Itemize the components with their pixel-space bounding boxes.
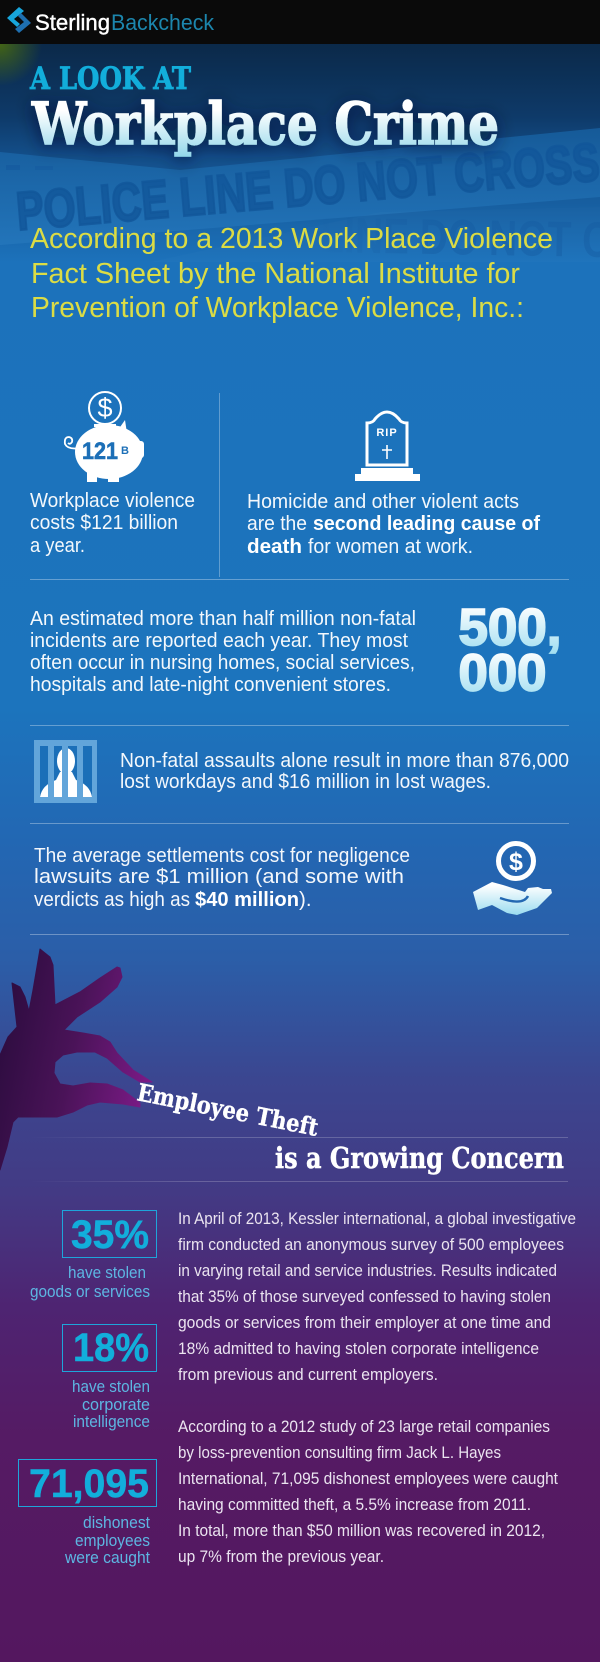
stat: homicide: for women at work.	[308, 535, 473, 558]
stat: 71,095: employees	[75, 1532, 150, 1550]
stat: lost workdays: Non-fatal assaults alone result in more than 876,000	[120, 749, 569, 772]
intro text	[30, 223, 553, 324]
big number 500,000	[458, 599, 562, 702]
stat: homicide: Homicide and other violent acts	[247, 490, 519, 513]
stat: settlements: verdicts as high as	[34, 888, 190, 911]
heading: employee theft	[30, 1077, 568, 1182]
stat: homicide: death	[247, 535, 302, 558]
big number 500,000: 000	[458, 644, 546, 702]
header bar	[0, 0, 600, 44]
stat: 71,095: were caught	[64, 1549, 150, 1567]
body text: Kessler survey: from previous and current employers.	[178, 1365, 438, 1384]
divider	[219, 393, 220, 577]
stat: violence cost: Workplace violence	[30, 489, 195, 512]
title: Workplace Crime	[31, 90, 499, 158]
stat: non-fatal incidents: An estimated more than half million non-fatal	[30, 607, 416, 630]
stat: 18%: 18%	[73, 1326, 149, 1370]
body text: Kessler survey: 18% admitted to having stolen corporate intelligence	[178, 1339, 539, 1358]
body text: Kessler survey: that 35% of those surveyed confessed to having stolen	[178, 1287, 551, 1306]
stat: lost workdays: lost workdays and $16 million in lost wages.	[120, 770, 491, 793]
stat: settlements: lawsuits are $1 million (and some with	[34, 865, 404, 888]
icon: RIP tombstone: RIP	[376, 427, 398, 439]
stat: 35%: have stolen	[68, 1264, 146, 1282]
logo: Sterling Backcheck: Backcheck	[111, 10, 215, 35]
stat: 71,095: 71,095	[29, 1462, 149, 1506]
logo: Sterling Backcheck: Sterling	[35, 10, 110, 35]
stat: 35%	[30, 1210, 156, 1301]
stat: homicide: second leading cause of	[313, 512, 540, 535]
stat: homicide	[247, 490, 540, 558]
title	[29, 61, 499, 158]
stat: non-fatal incidents	[30, 607, 416, 696]
body text: Jack L. Hayes study: In total, more than $50 million was recovered in 2012,	[178, 1521, 545, 1540]
stat: 35%: 35%	[71, 1213, 149, 1257]
stat: 18%: have stolen	[72, 1378, 150, 1396]
body text: Kessler survey: firm conducted an anonymous survey of 500 employees	[178, 1235, 564, 1254]
icon: hand holding coin	[473, 844, 552, 915]
icon: thieving hand	[0, 949, 152, 1170]
body text: Kessler survey: in varying retail and service industries. Results indicated	[178, 1261, 557, 1280]
body text: Jack L. Hayes study: by loss-prevention consulting firm Jack L. Hayes	[178, 1443, 501, 1462]
stat: 18%: intelligence	[73, 1413, 150, 1431]
stat: violence cost	[30, 489, 195, 557]
body text: Jack L. Hayes study: having committed theft, a 5.5% increase from 2011.	[178, 1495, 531, 1514]
intro text: Prevention of Workplace Violence, Inc.:	[31, 292, 524, 324]
title: A LOOK AT	[29, 61, 191, 97]
stat: 35%: goods or services	[30, 1283, 150, 1301]
stat: non-fatal incidents: hospitals and late-night convenient stores.	[30, 673, 391, 696]
stat: violence cost: costs $121 billion	[30, 511, 178, 534]
intro text: According to a 2013 Work Place Violence	[30, 223, 553, 255]
icon: hand holding coin: $	[509, 848, 523, 876]
icon: RIP tombstone	[355, 412, 420, 481]
icon: piggy bank 121B: 121	[82, 438, 118, 465]
body text: Jack L. Hayes study: up 7% from the previous year.	[178, 1547, 384, 1566]
stat: violence cost: a year.	[30, 534, 85, 557]
body text: Kessler survey	[178, 1209, 576, 1384]
icon: person behind bars	[34, 740, 97, 803]
stat: homicide: are the	[247, 512, 307, 535]
stat: non-fatal incidents: often occur in nursing homes, social services,	[30, 651, 415, 674]
body text: Jack L. Hayes study	[178, 1417, 558, 1566]
intro text: Fact Sheet by the National Institute for	[31, 258, 520, 290]
stat: 71,095: dishonest	[83, 1514, 150, 1532]
big number 500,000: 500,	[458, 599, 562, 657]
stat: 71,095	[18, 1460, 156, 1567]
icon: piggy bank 121B	[65, 392, 144, 482]
heading: employee theft: Employee Theft	[135, 1077, 321, 1142]
stat: settlements: $40 million	[195, 888, 299, 911]
stat: settlements: ).	[299, 888, 312, 911]
stat: non-fatal incidents: incidents are reported each year. They most	[30, 629, 408, 652]
stat: lost workdays	[120, 749, 569, 793]
stat: 18%	[62, 1324, 156, 1431]
stat: settlements	[34, 844, 410, 911]
logo: Sterling Backcheck	[7, 7, 215, 35]
icon: piggy bank 121B: B	[121, 445, 129, 457]
icon: piggy bank 121B: $	[97, 393, 113, 423]
body text: Jack L. Hayes study: According to a 2012 study of 23 large retail companies	[178, 1417, 550, 1436]
body text: Jack L. Hayes study: International, 71,095 dishonest employees were caught	[178, 1469, 558, 1488]
stat: 18%: corporate	[82, 1396, 150, 1414]
divider lines	[30, 579, 569, 935]
body text: Kessler survey: goods or services from their employer at one time and	[178, 1313, 551, 1332]
stat: settlements: The average settlements cost for negligence	[34, 844, 410, 867]
